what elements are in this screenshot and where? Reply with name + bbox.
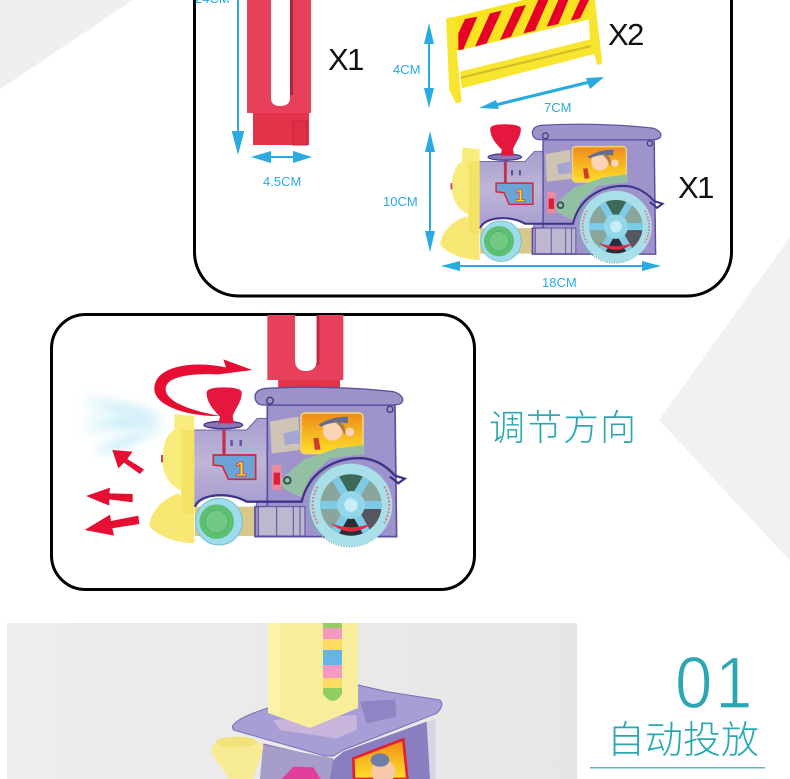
roof pale center [273, 715, 357, 738]
number 01: 01 [675, 642, 755, 724]
label: 18CM: 18CM [542, 275, 577, 290]
yellow launcher column [268, 623, 358, 728]
arrow: train width [441, 261, 661, 271]
arrow: launcher height [233, 0, 243, 151]
label: barrier quantity: X2 [608, 17, 643, 52]
icon: train: 1 [515, 185, 525, 205]
side wall [427, 719, 435, 779]
launcher domino stripes [323, 623, 342, 701]
label: 10CM: 10CM [383, 194, 418, 209]
arrow: train height [425, 131, 435, 252]
train body [149, 387, 405, 547]
arrow: left [86, 488, 133, 506]
heading: auto dispense: 自动投放 [607, 720, 759, 762]
lower left window [260, 745, 333, 779]
train body: 1 [235, 458, 247, 481]
panel outline [194, 0, 732, 296]
panel outline [52, 314, 474, 590]
cab window [353, 739, 407, 779]
yellow chimney [211, 739, 263, 779]
photo: train with yellow launcher [7, 623, 577, 779]
chimney opening [216, 737, 257, 747]
panel: direction adjustment [52, 314, 474, 590]
panel: parts list [194, 0, 732, 296]
label: launcher quantity: X1 [328, 42, 363, 77]
arrow: rotation swirl [154, 359, 252, 416]
background diamond right [659, 237, 790, 561]
scene: train with launcher [80, 315, 405, 547]
arrow: launcher width [251, 151, 312, 163]
divider under heading [590, 767, 765, 768]
arrow: barrier height [424, 23, 434, 108]
icon: train [440, 124, 663, 263]
red launcher [267, 315, 343, 389]
background triangle top left [0, 0, 133, 89]
photo background [7, 623, 577, 779]
label: 4CM: 4CM [393, 62, 420, 77]
front face [260, 722, 430, 779]
roof [232, 685, 442, 756]
icon: red launcher column [247, 0, 311, 145]
label: 7CM: 7CM [544, 100, 571, 115]
arrow: barrier width [479, 77, 604, 109]
heading: adjust direction: 调节方向 [489, 407, 637, 448]
arrow: down left [85, 515, 139, 536]
interior pink parts [282, 767, 321, 779]
icon: barrier [446, 0, 602, 103]
label: train quantity: X1 [678, 170, 713, 205]
light rays [80, 392, 165, 457]
roof recess [360, 699, 397, 723]
train top [211, 685, 442, 779]
label: 4.5CM: 4.5CM [263, 174, 301, 189]
driver [371, 753, 395, 779]
arrow: up left [112, 450, 144, 474]
